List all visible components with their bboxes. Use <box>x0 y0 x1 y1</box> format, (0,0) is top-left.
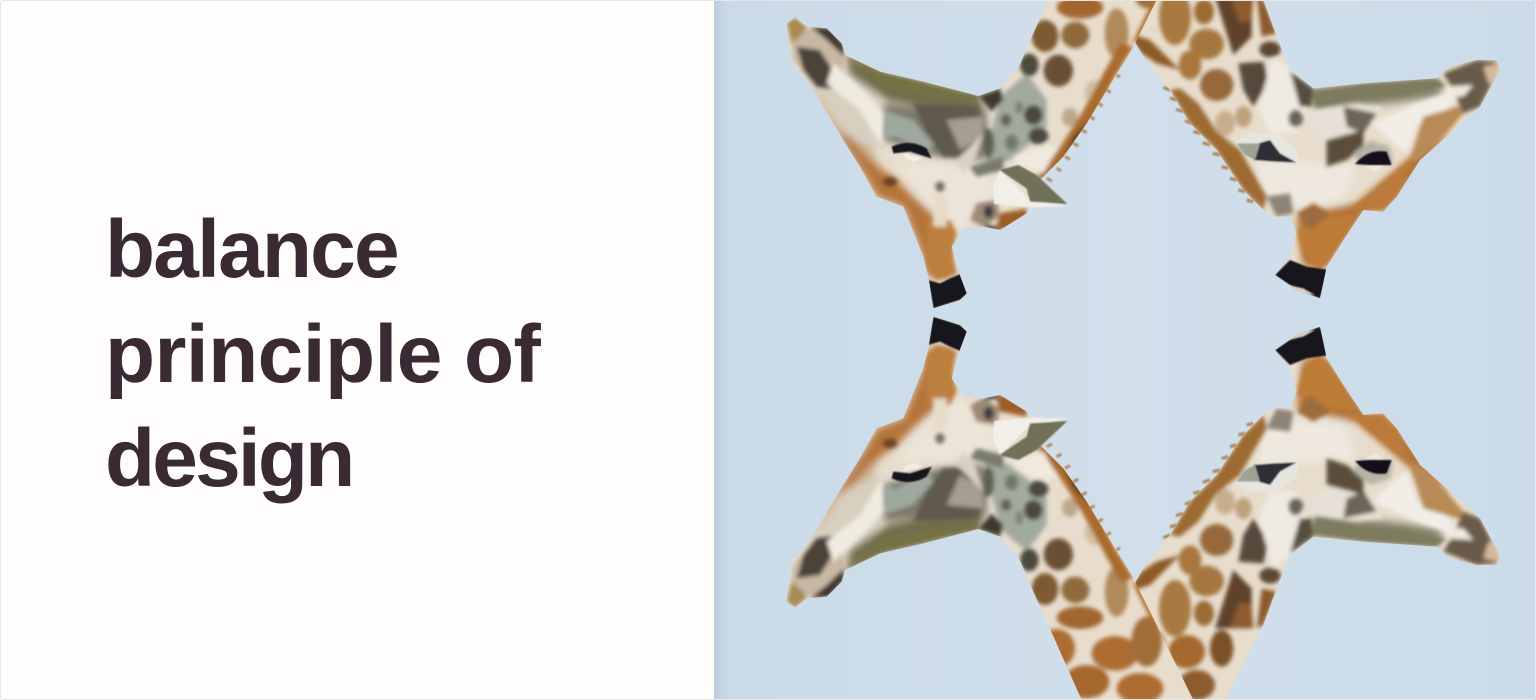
panel: mirrored giraffe image <box>714 0 1536 700</box>
title: balance <box>105 204 398 295</box>
bottom-right giraffe reflection <box>1110 327 1500 700</box>
title <box>105 204 541 504</box>
sky background <box>714 0 1536 700</box>
top-right giraffe <box>1110 0 1500 298</box>
panel: text side <box>0 0 714 700</box>
bottom-left giraffe reflection <box>787 317 1193 700</box>
title: principle of <box>105 309 540 400</box>
top-left giraffe <box>787 0 1193 308</box>
title: design <box>105 413 352 504</box>
